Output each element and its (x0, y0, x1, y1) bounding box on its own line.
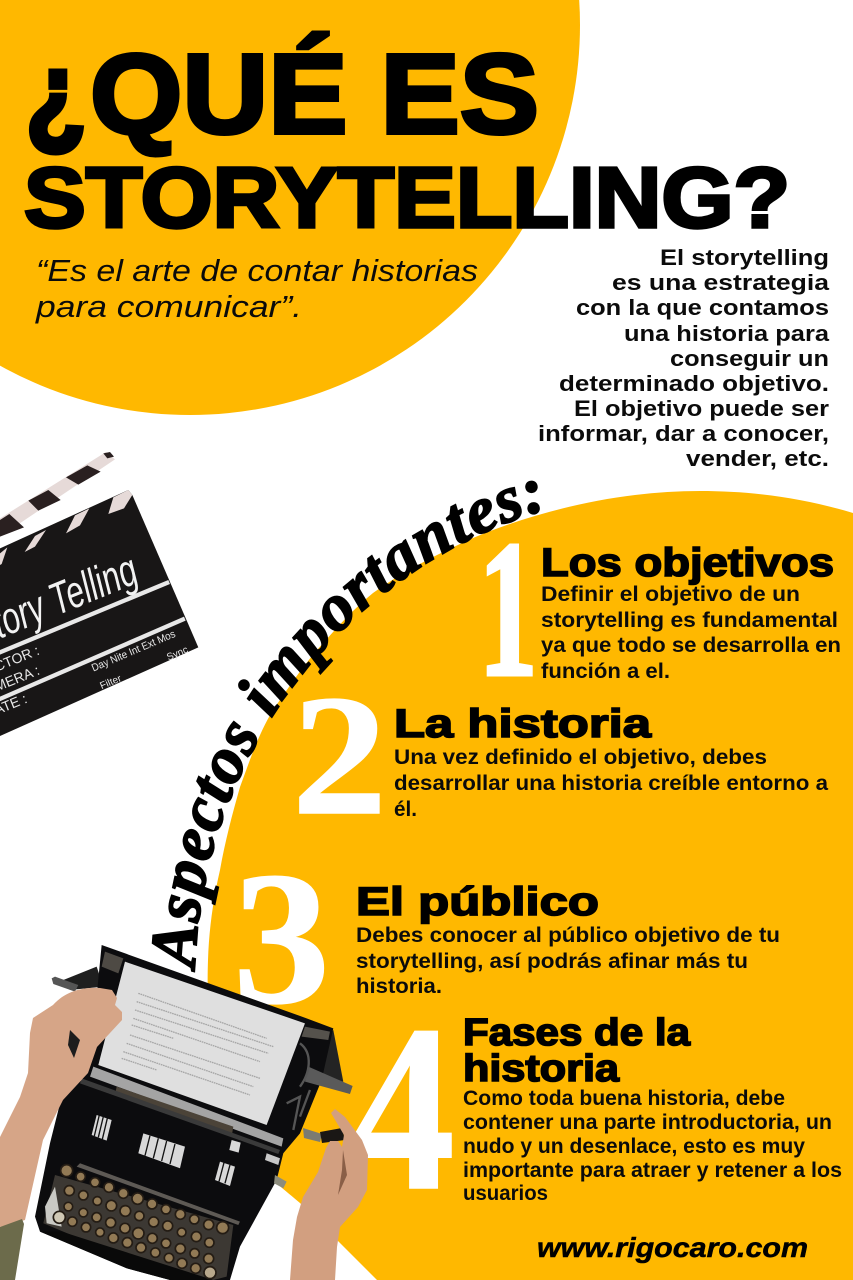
top carriage detail (102, 952, 123, 973)
item 4: Fases de la (463, 1012, 691, 1054)
item 1 (541, 541, 841, 683)
right carriage wing (317, 1030, 343, 1082)
icon: typewriter with hands (0, 945, 368, 1280)
item 3: storytelling, así podrás afinar más tu (356, 950, 748, 973)
intro text: El objetivo puede ser (574, 396, 829, 421)
item 1: ya que todo se desarrolla en (541, 634, 841, 657)
left sleeve (0, 1219, 24, 1280)
title: STORYTELLING? (24, 151, 790, 246)
icon: clapperboard: Sync (165, 645, 190, 663)
bottom yellow shape (208, 491, 853, 1280)
item 4: Como toda buena historia, debe (463, 1087, 785, 1110)
intro text: es una estrategia (612, 270, 830, 295)
item 3: historia. (356, 975, 442, 998)
title (24, 28, 790, 246)
intro text: con la que contamos (576, 295, 829, 320)
paper (98, 962, 305, 1125)
icon: clapperboard (0, 452, 198, 736)
number 4: 4 (350, 977, 455, 1240)
left arm and hand (0, 988, 122, 1227)
keys (53, 1165, 229, 1279)
top yellow circle (0, 0, 580, 415)
right hand (290, 1109, 368, 1280)
item 1: Definir el objetivo de un (541, 583, 800, 606)
item 2: La historia (394, 702, 652, 746)
left carriage arm (63, 967, 103, 990)
quote: para comunicar”. (35, 289, 302, 324)
intro text: una historia para (624, 321, 830, 346)
carriage knob (303, 1128, 345, 1143)
item 4: historia (463, 1048, 620, 1090)
intro text: conseguir un (670, 346, 829, 371)
item 3: Debes conocer al público objetivo de tu (356, 924, 780, 947)
type bars (92, 1115, 241, 1186)
item 2: Una vez definido el objetivo, debes (394, 746, 767, 769)
title: QUÉ ES (90, 31, 539, 157)
item 2: desarrollar una historia creíble entorno a (394, 772, 828, 795)
icon: clapperboard: Day Nite Int Ext Mos (90, 628, 177, 674)
number 1: 1 (478, 499, 538, 718)
item 3 (356, 880, 780, 998)
right hand shadow (338, 1150, 347, 1195)
website: www.rigocaro.com (537, 1232, 808, 1263)
item 4 (463, 1012, 842, 1205)
number 3: 3 (233, 834, 330, 1044)
intro text: informar, dar a conocer, (538, 421, 829, 446)
platen (90, 1067, 283, 1147)
item 2: él. (394, 798, 417, 821)
left hand shadow (68, 1030, 80, 1058)
intro text: determinado objetivo. (559, 371, 829, 396)
item 2 (394, 702, 828, 821)
item 4: usuarios (463, 1182, 548, 1205)
item 1: storytelling es fundamental (541, 609, 838, 632)
typed lines on paper (122, 993, 273, 1095)
item 3: El público (356, 880, 599, 924)
quote: “Es el arte de contar historias (36, 253, 478, 288)
typewriter body (35, 945, 333, 1280)
right carriage arm (305, 1067, 353, 1094)
icon: clapperboard: Filter (99, 673, 124, 692)
item 4: nudo y un desenlace, esto es muy (463, 1135, 805, 1158)
quote (35, 253, 478, 324)
title: ¿ (26, 28, 86, 158)
item 1: función a el. (541, 660, 670, 683)
intro text (538, 245, 830, 471)
right mechanism details (287, 1043, 310, 1130)
keyboard deck (43, 1175, 233, 1280)
item 4: contener una parte introductoria, un (463, 1111, 832, 1134)
intro text: El storytelling (660, 245, 829, 270)
intro text: vender, etc. (686, 446, 829, 471)
item 1: Los objetivos (541, 541, 834, 585)
number 2: 2 (292, 661, 387, 851)
item 4: importante para atraer y retener a los (463, 1159, 842, 1182)
curved heading: Aspectos importantes: (152, 480, 540, 973)
